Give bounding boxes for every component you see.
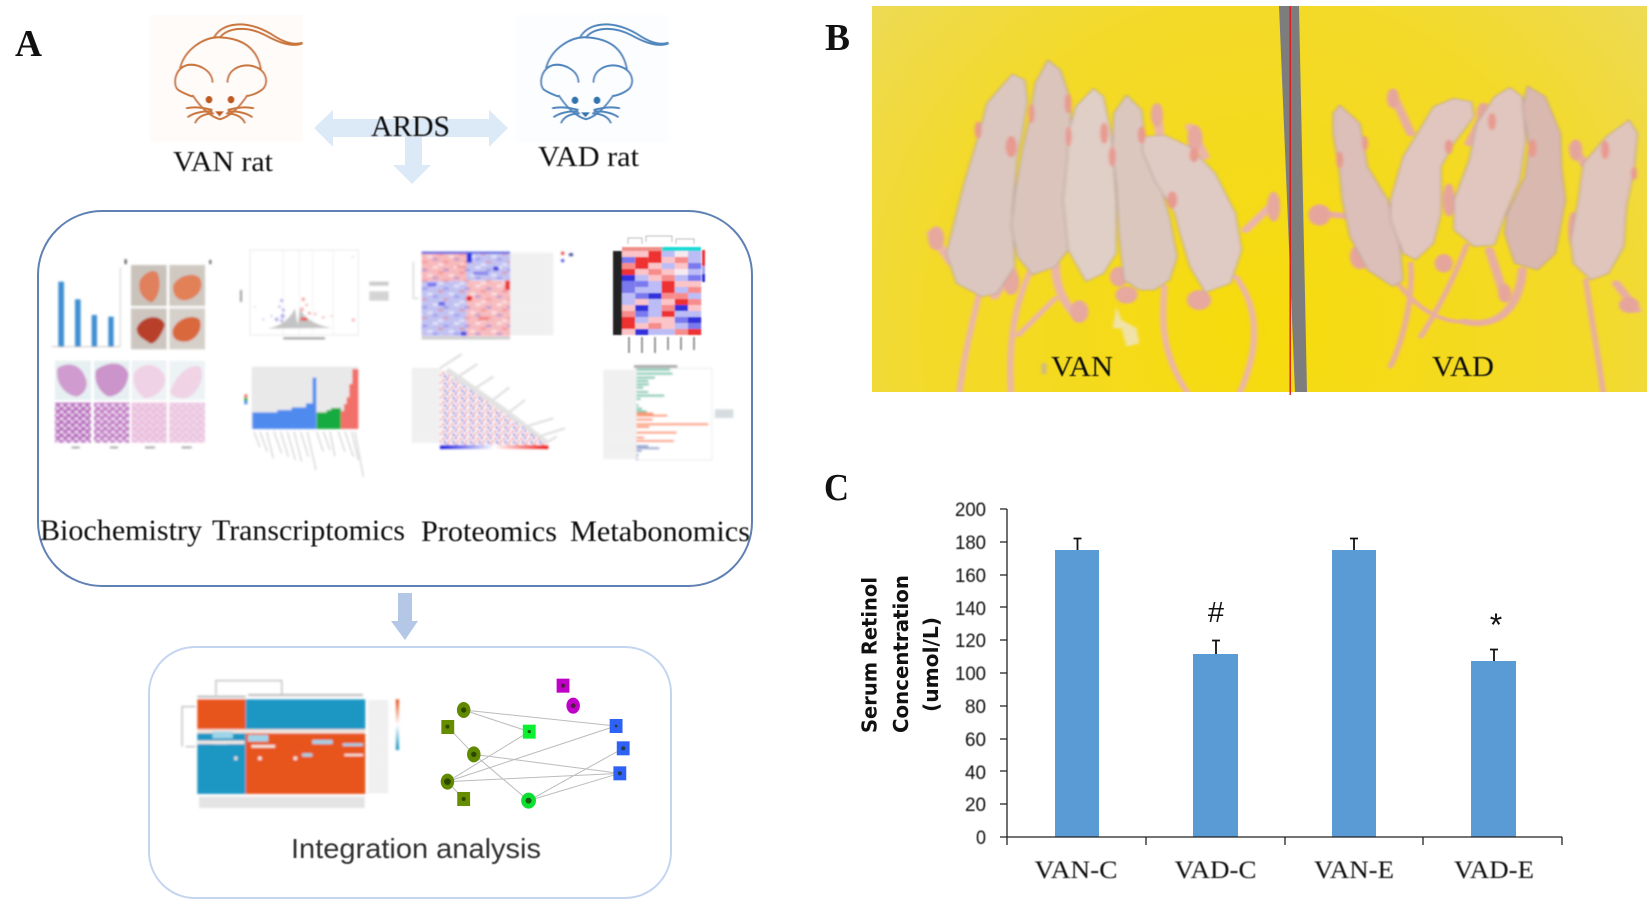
y axis tick labels: 140 xyxy=(955,599,986,620)
chart: metabonomics heatmap xyxy=(613,236,705,353)
label: ARDS: ARDS xyxy=(371,110,450,143)
arrow: three-way ARDS arrow xyxy=(314,110,508,184)
chart: integration network xyxy=(441,679,630,809)
y axis tick labels: 200 xyxy=(955,500,986,521)
significance marker *: * xyxy=(1490,607,1502,643)
y axis title: Serum Retinol xyxy=(858,577,882,733)
panel A: multi-omics workflow xyxy=(15,15,752,898)
panel B: rat photograph xyxy=(825,6,1647,397)
panel C: serum retinol bar chart xyxy=(824,467,1562,884)
label: VAD: VAD xyxy=(1432,351,1494,383)
panel letter A: A xyxy=(15,23,43,65)
label: Proteomics: Proteomics xyxy=(421,515,557,548)
label: VAD rat: VAD rat xyxy=(538,141,639,173)
image: VAN group of rats xyxy=(928,60,1280,397)
label: Integration analysis: Integration analysis xyxy=(291,833,541,864)
chart: transcriptomics enrichment bars xyxy=(244,367,363,477)
chart: biochemistry bar chart xyxy=(52,259,211,347)
y axis title xyxy=(858,575,943,733)
x axis labels: VAD-C xyxy=(1174,857,1256,884)
y axis tick labels: 0 xyxy=(976,828,986,849)
image: paper scrap xyxy=(1042,307,1139,374)
x axis labels: VAN-E xyxy=(1314,857,1394,884)
image: VAD group of rats xyxy=(1308,86,1639,397)
image: lung histology panels xyxy=(55,361,205,448)
y axis title: Concentration xyxy=(889,575,913,733)
label: Biochemistry: Biochemistry xyxy=(40,514,202,547)
y axis tick labels: 20 xyxy=(965,795,986,816)
bars with error bars xyxy=(1055,538,1516,837)
label: VAN: VAN xyxy=(1051,351,1113,383)
icon: VAN rat orange mouse xyxy=(150,15,302,142)
y axis tick labels: 180 xyxy=(955,533,986,554)
chart: volcano plot xyxy=(240,250,389,339)
y axis tick labels: 80 xyxy=(965,697,986,718)
image: ruler strip xyxy=(1279,6,1307,395)
y axis tick labels xyxy=(955,500,986,849)
label: Transcriptomics: Transcriptomics xyxy=(212,514,405,547)
y axis tick labels: 40 xyxy=(965,763,986,784)
chart: proteomics heatmap xyxy=(413,252,573,339)
chart: correlation triangle xyxy=(412,354,565,449)
chart: GO enrichment bars xyxy=(603,365,733,460)
panel: omics box xyxy=(38,211,752,586)
axes xyxy=(1000,509,1562,845)
image: yellow background xyxy=(872,6,1647,392)
icon: VAD rat blue mouse xyxy=(516,15,668,142)
x axis labels: VAD-E xyxy=(1454,857,1534,884)
panel letter C: C xyxy=(824,467,849,509)
network nodes xyxy=(441,679,630,809)
significance marker #: # xyxy=(1208,597,1224,629)
panel: integration box xyxy=(149,647,671,898)
label: Metabonomics: Metabonomics xyxy=(570,515,750,548)
y axis tick labels: 100 xyxy=(955,664,986,685)
y axis tick labels: 160 xyxy=(955,566,986,587)
panel letter B: B xyxy=(825,17,850,59)
x axis labels xyxy=(1034,857,1534,884)
image: liver photographs xyxy=(131,265,205,349)
y axis title: (umol/L) xyxy=(919,617,943,712)
network edges xyxy=(447,710,623,801)
label: VAN rat: VAN rat xyxy=(173,146,273,178)
y axis tick labels: 60 xyxy=(965,730,986,751)
y axis tick labels: 120 xyxy=(955,631,986,652)
x axis labels: VAN-C xyxy=(1034,857,1118,884)
chart: integration heatmap xyxy=(182,681,399,808)
arrow: down to integration xyxy=(391,593,418,640)
